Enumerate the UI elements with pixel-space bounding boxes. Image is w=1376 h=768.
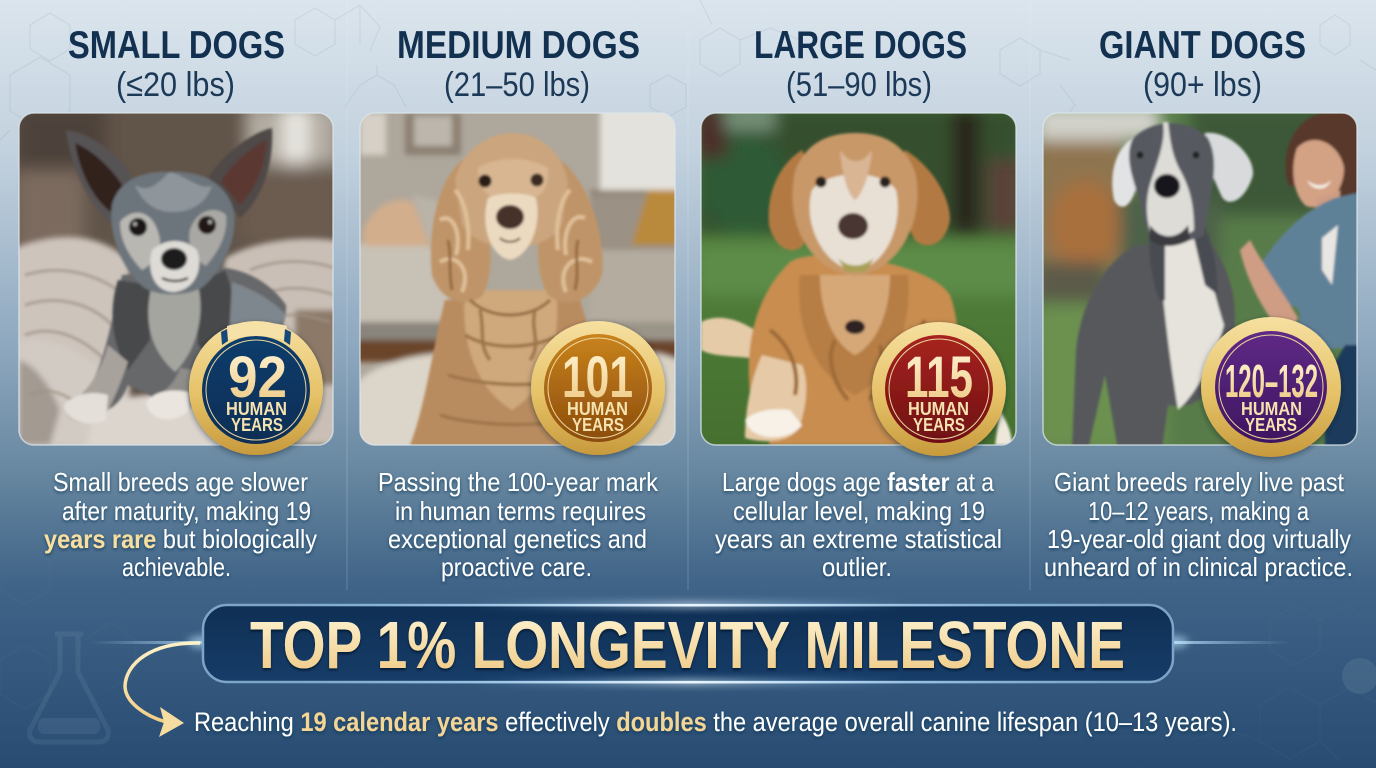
photo: small dog on blanket	[10, 105, 345, 450]
dog body	[1072, 245, 1235, 450]
ears	[1112, 137, 1137, 207]
column: large dogs	[695, 24, 1025, 582]
column dividers	[347, 0, 1030, 590]
badge: 115 human years: YEARS	[913, 414, 965, 435]
head	[111, 172, 235, 294]
column: giant dogs	[1035, 24, 1365, 582]
badge: 101 human years: 101	[562, 345, 633, 410]
heading: medium dogs: MEDIUM DOGS	[397, 24, 640, 67]
heading: medium dogs	[397, 24, 640, 104]
description: giant dogs	[1044, 467, 1353, 582]
icon: lab flask	[30, 634, 108, 742]
description: large dogs: cellular level, making 19	[733, 496, 985, 526]
banner: top 1% longevity milestone: TOP 1% LONGEVITY MILESTONE	[250, 608, 1125, 683]
arrow: banner to summary	[125, 643, 200, 737]
body	[80, 268, 286, 412]
summary sentence: Reaching 19 calendar years effectively doubles the average overall canine lifespan (10–13 years).	[194, 707, 1237, 737]
description: large dogs	[715, 467, 1002, 582]
badge: 115 human years: HUMAN	[908, 398, 969, 419]
description: large dogs: years an extreme statistical	[715, 524, 1002, 554]
badge: 92 human years: YEARS	[231, 414, 283, 435]
photo: great dane with woman	[1035, 105, 1365, 450]
description: small dogs: years rare but biologically	[44, 524, 317, 554]
heading: giant dogs: (90+ lbs)	[1143, 66, 1262, 104]
column: medium dogs	[359, 31, 676, 584]
description: medium dogs: proactive care.	[441, 552, 592, 582]
badge: 92 human years: HUMAN	[226, 398, 287, 419]
badge: 120-132 human years	[1201, 317, 1341, 457]
description: large dogs: Large dogs age faster at a	[722, 467, 994, 497]
badge: 120-132 human years: HUMAN	[1241, 398, 1302, 419]
badge: 115 human years	[872, 322, 1006, 456]
badge: 92 human years: 92	[228, 345, 287, 410]
badge: 101 human years: YEARS	[572, 414, 624, 435]
description: medium dogs: exceptional genetics and	[388, 524, 647, 554]
heading: small dogs: (≤20 lbs)	[116, 66, 235, 104]
heading: medium dogs: (21–50 lbs)	[444, 66, 590, 104]
heading: small dogs	[68, 24, 285, 104]
photo: cocker spaniel in living room	[359, 112, 676, 446]
description: small dogs: achievable.	[122, 552, 231, 582]
description: giant dogs: Giant breeds rarely live past	[1054, 467, 1345, 497]
description: medium dogs	[378, 467, 659, 582]
description: medium dogs: in human terms requires	[395, 496, 646, 526]
woman	[1284, 113, 1357, 197]
description: medium dogs: Passing the 100-year mark	[378, 467, 659, 497]
heading: large dogs: (51–90 lbs)	[786, 66, 932, 104]
ears and head	[769, 150, 813, 250]
photo: golden retriever on grass	[695, 105, 1025, 445]
description: small dogs	[44, 467, 317, 582]
description: small dogs: Small breeds age slower	[53, 467, 308, 497]
badge: 101 human years: HUMAN	[567, 398, 628, 419]
heading: large dogs	[754, 24, 967, 104]
description: large dogs: outlier.	[822, 552, 892, 582]
heading: giant dogs	[1099, 24, 1306, 104]
badge: 92 human years	[189, 321, 323, 455]
ears	[66, 130, 136, 226]
badge: 101 human years	[531, 321, 665, 455]
badge: 115 human years: 115	[905, 345, 973, 410]
description: giant dogs: 10–12 years, making a	[1088, 496, 1309, 526]
column: small dogs	[10, 24, 345, 582]
tail and body	[701, 316, 755, 360]
head	[1129, 123, 1214, 242]
badge: 120-132 human years: YEARS	[1245, 414, 1297, 435]
heading: small dogs: SMALL DOGS	[68, 24, 285, 67]
description: small dogs: after maturity, making 19	[62, 496, 311, 526]
heading: giant dogs: GIANT DOGS	[1099, 24, 1306, 67]
ears and head	[431, 160, 491, 302]
body	[408, 298, 588, 445]
heading: large dogs: LARGE DOGS	[754, 24, 967, 67]
